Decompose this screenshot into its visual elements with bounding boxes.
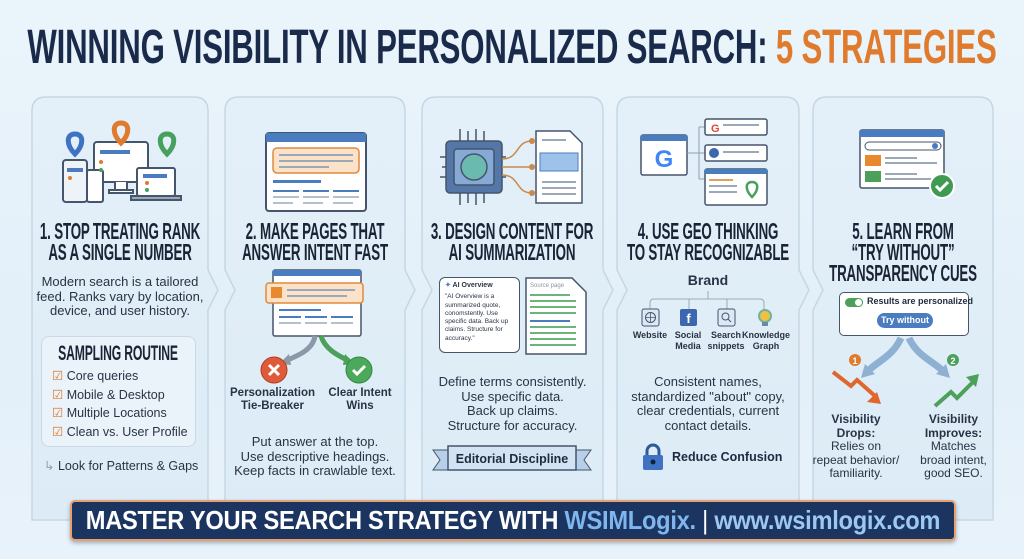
patterns note: ↳ Look for Patterns & Gaps [44,459,198,473]
label: personalization tie-breaker [230,387,315,412]
icon: AI chip and document [440,129,583,205]
panel 4: 4. USE GEO THINKING [638,218,778,244]
label: clear intent wins: Clear Intent [328,387,392,399]
panel 3 [431,129,594,471]
body text 3: Structure for accuracy. [448,418,577,432]
ribbon: editorial discipline: Editorial Discipline [456,452,568,466]
heading 5 [829,218,977,286]
icon: devices with location pins [62,120,182,203]
ribbon: editorial discipline [432,445,592,471]
label: visibility improves: good SEO. [924,466,983,480]
panel 2: 2. MAKE PAGES THAT [246,218,384,244]
sampling routine box: SAMPLING ROUTINE [58,342,178,365]
panel 1 [36,120,203,473]
brand tree diagram: f [686,311,691,326]
label: visibility drops: Visibility [831,412,881,426]
label: personalization tie-breaker: Personalization [230,387,315,399]
body text 4 [631,374,785,432]
body text 3: Use specific data. [461,388,564,404]
body text 1: Modern search is a tailored feed. Ranks vary by location, device, and user history. [37,274,203,318]
panel 4: TO STAY RECOGNIZABLE [627,239,789,265]
label: visibility improves: Visibility [929,412,978,426]
body text 3: Define terms consistently. [439,374,586,389]
label: clear intent wins: Wins [346,400,374,412]
panel 3: 3. DESIGN CONTENT FOR [431,218,593,244]
body text 4: standardized "about" copy, [631,388,785,404]
body text 2: Put answer at the top. [252,434,378,449]
icon: google knowledge sources [640,118,768,206]
AI overview callout: "AI Overview is a summarized quote, conomstently. Use specific data. Back up claims. Structure for accuracy." [445,293,508,342]
heading 2 [242,218,388,265]
panel 1: AS A SINGLE NUMBER [48,239,192,265]
icon: green check [346,356,372,384]
icon: red x [260,356,288,384]
panel 2 [230,132,396,478]
brand tree diagram: Media [675,340,701,350]
icon: google knowledge sources: G [711,123,720,135]
label: visibility improves [920,412,987,480]
brand tree diagram: Brand [688,272,728,288]
panel 2: ANSWER INTENT FAST [242,239,388,265]
AI overview callout [439,277,520,353]
sampling routine box: ☑ Multiple Locations [52,406,167,420]
panel 5: “TRY WITHOUT” [852,239,954,265]
brand tree diagram: Social [675,330,701,340]
arrows: visibility drops / improves [832,336,979,408]
label: visibility drops: repeat behavior/ [813,452,899,466]
label: clear intent wins [328,387,392,412]
label: visibility drops: Drops: [837,426,875,440]
source page [525,277,587,355]
sampling routine box: ☑ Clean vs. User Profile [52,424,188,438]
body text 4: Consistent names, [654,374,762,389]
brand tree diagram: snippets [707,340,744,350]
AI overview callout: ✦ AI Overview [445,282,493,289]
icon: google knowledge sources: G [655,146,673,173]
sampling routine box [41,336,196,447]
panel 5: 5. LEARN FROM [852,218,954,244]
footer banner: MASTER YOUR SEARCH STRATEGY WITH WSIMLogix. | www.wsimlogix.com [86,505,940,535]
toggle panel: results are personalized: Try without [881,315,929,325]
brand tree diagram: Graph [753,340,779,350]
panel 5: TRANSPARENCY CUES [829,260,977,286]
brand tree diagram [632,272,790,351]
label: personalization tie-breaker: Tie-Breaker [241,400,304,412]
panel 4 [627,118,790,470]
label: visibility improves: Improves: [925,426,982,440]
source page: Source page [530,283,565,289]
body text 3 [439,374,586,432]
brand tree diagram: Website [633,330,667,340]
label: visibility improves: broad intent, [920,452,987,466]
label: visibility drops: Relies on [831,439,881,453]
icon: lock + reduce confusion [643,444,782,470]
toggle panel: results are personalized: Results are personalized [867,296,973,306]
heading 1 [40,218,200,265]
body text 4: contact details. [665,418,751,432]
arrows: visibility drops / improves: 2 [950,356,956,366]
panel 5 [813,129,987,480]
heading 4 [627,218,789,265]
icon: lock + reduce confusion: Reduce Confusion [672,450,782,464]
body text 2: Keep facts in crawlable text. [234,463,396,478]
brand tree diagram: Search [711,330,741,340]
heading 3 [431,218,594,265]
body text 2 [234,434,396,478]
sampling routine box: ☑ Core queries [52,369,138,383]
brand tree diagram: Knowledge [742,330,790,340]
panel 1: 1. STOP TREATING RANK [40,218,200,244]
arrows: visibility drops / improves: 1 [852,356,858,366]
label: visibility drops: familiarity. [829,466,883,480]
diagram: intent vs personalization [265,269,364,365]
toggle panel: results are personalized [839,292,969,336]
panel 3: AI SUMMARIZATION [449,239,575,265]
body text 2: Use descriptive headings. [241,448,389,464]
label: visibility drops [813,412,900,480]
text: WINNING VISIBILITY IN PERSONALIZED SEARCH: 5 STRATEGIES [27,21,997,74]
icon: webpage with highlighted answer [265,132,367,212]
label: visibility improves: Matches [931,439,976,453]
body text 4: clear credentials, current [637,403,779,418]
icon: results page with check [859,129,955,199]
sampling routine box: ☑ Mobile & Desktop [52,388,165,402]
body text 3: Back up claims. [467,403,558,418]
